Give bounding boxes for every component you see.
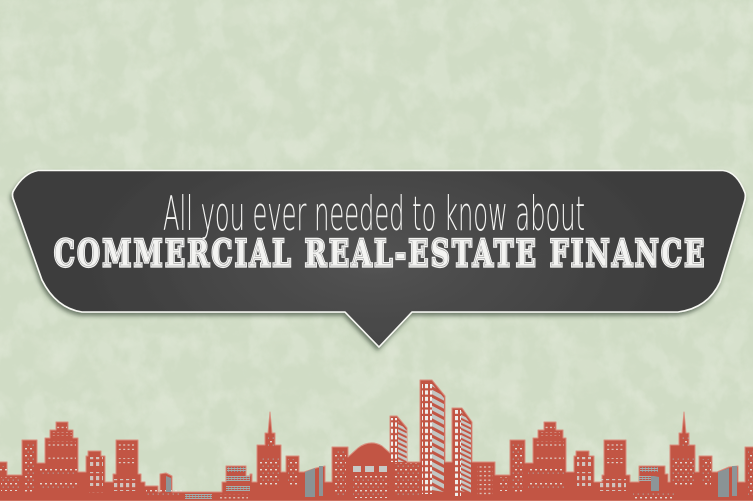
right cluster windows [500,424,753,499]
skyline silhouette [0,380,753,501]
centre cluster windows [259,382,493,498]
city skyline [0,380,753,501]
heading line: collegiate title: COMMERCIAL REAL-ESTATE FINANCE [54,234,704,275]
heading line: collegiate title: COMMERCIAL REAL-ESTATE FINANCE [54,234,704,275]
speech bubble [12,170,745,347]
left cluster windows [0,424,250,499]
